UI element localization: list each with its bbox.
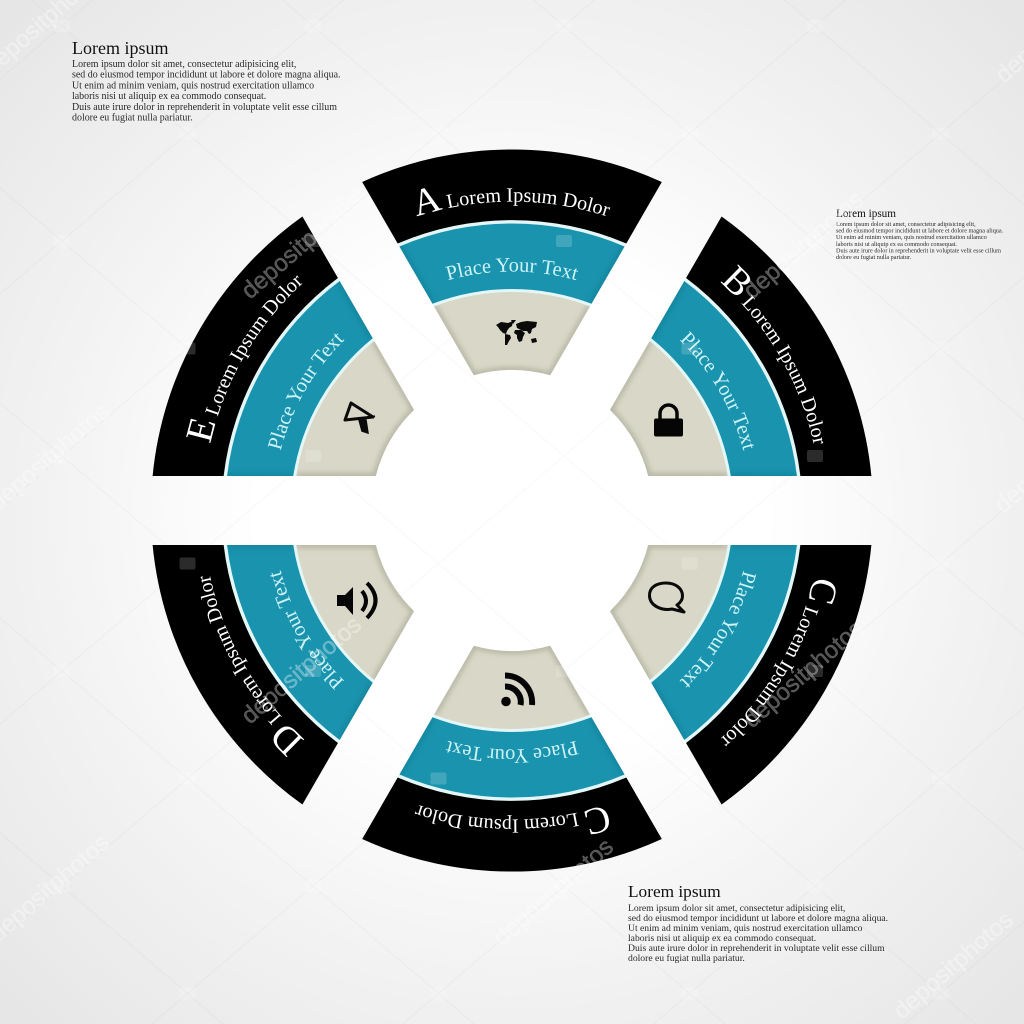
text block: bottom right: Ut enim ad minim veniam, quis nostrud exercitation ullamco [628, 923, 863, 934]
panel: segment D: Place Your Text [270, 570, 344, 690]
panel: segment E [152, 216, 414, 476]
panel: segment C right: C Lorem Ipsum Dolor [721, 580, 836, 746]
text block: bottom right: Lorem ipsum dolor sit amet, consectetur adipisicing elit, [628, 903, 845, 914]
panel: segment B: Place Your Text [680, 330, 754, 451]
panel: segment B [610, 216, 872, 476]
text block: top left: Ut enim ad minim veniam, quis nostrud exercitation ullamco [72, 80, 314, 91]
panel: segment C right: Place Your Text [680, 570, 756, 688]
text block: top right: laboris nisi ut aliquip ex ea commodo consequat. [836, 241, 957, 248]
text block: top left: Lorem ipsum [72, 38, 168, 58]
text block: top left: Duis aute irure dolor in reprehenderit in voluptate velit esse cillum [72, 102, 337, 113]
text block: bottom right: sed do eiusmod tempor incididunt ut labore et dolore magna aliqua. [628, 913, 888, 924]
icon: rss [501, 675, 532, 706]
watermark overlay: depositphotos [488, 833, 619, 952]
icon: speaker [337, 583, 376, 618]
panel: segment A: A Lorem Ipsum Dolor [416, 188, 610, 216]
text block: top right [836, 208, 1004, 261]
text block: top left: Lorem ipsum dolor sit amet, consectetur adipisicing elit, [72, 59, 296, 70]
panel: segment D [152, 545, 414, 804]
watermark overlay: depositphotos [236, 186, 367, 305]
watermark overlay: depositphotos [488, 400, 619, 519]
panel: segment A: Place Your Text [445, 258, 578, 280]
text block: bottom right [628, 882, 888, 964]
watermark overlay: depositphotos [738, 186, 869, 305]
panel: segment B: B Lorem Ipsum Dolor [720, 264, 824, 444]
panel: segment C bottom: C Lorem Ipsum Dolor [414, 805, 609, 834]
text block: bottom right: Duis aute irure dolor in reprehenderit in voluptate velit esse cillum [628, 943, 885, 954]
panel: segment C bottom [362, 646, 662, 872]
watermark overlay: depositphotos [888, 906, 1019, 1024]
text block: top right: sed do eiusmod tempor incididunt ut labore et dolore magna aliqua. [836, 228, 1004, 235]
icon: megaphone [345, 403, 375, 433]
panel: segment A [362, 150, 662, 376]
text block: top left: laboris nisi ut aliquip ex ea commodo consequat. [72, 91, 266, 102]
text block: top left: dolore eu fugiat nulla pariatur. [72, 112, 193, 124]
text block: top left: sed do eiusmod tempor incididunt ut labore et dolore magna aliqua. [72, 70, 341, 81]
text block: top right: Lorem ipsum [836, 208, 896, 220]
watermark overlay: depositphotos [738, 615, 869, 734]
text block: top right: Duis aute irure dolor in reprehenderit in voluptate velit esse cillum [836, 247, 1001, 254]
text block: top right: dolore eu fugiat nulla pariatur. [836, 254, 912, 261]
panel: segment E: Place Your Text [268, 334, 344, 450]
text block: bottom right: laboris nisi ut aliquip ex ea commodo consequat. [628, 933, 816, 944]
text block: top left [72, 38, 341, 124]
text block: top right: Ut enim ad minim veniam, quis nostrud exercitation ullamco [836, 234, 987, 241]
icon: world map [496, 320, 537, 345]
text block: bottom right: dolore eu fugiat nulla pariatur. [628, 953, 745, 964]
panel: segment D: D Lorem Ipsum Dolor [200, 576, 304, 758]
icon: speech bubble [649, 583, 684, 612]
icon: padlock [654, 405, 683, 436]
watermark overlay: depositphotos [236, 611, 367, 730]
panel: segment E: E Lorem Ipsum Dolor [186, 276, 302, 444]
panel: segment C right [610, 545, 872, 804]
panel: segment C bottom: Place Your Text [446, 740, 579, 763]
text block: bottom right: Lorem ipsum [628, 882, 721, 901]
text block: top right: Lorem ipsum dolor sit amet, consectetur adipisicing elit, [836, 221, 976, 228]
